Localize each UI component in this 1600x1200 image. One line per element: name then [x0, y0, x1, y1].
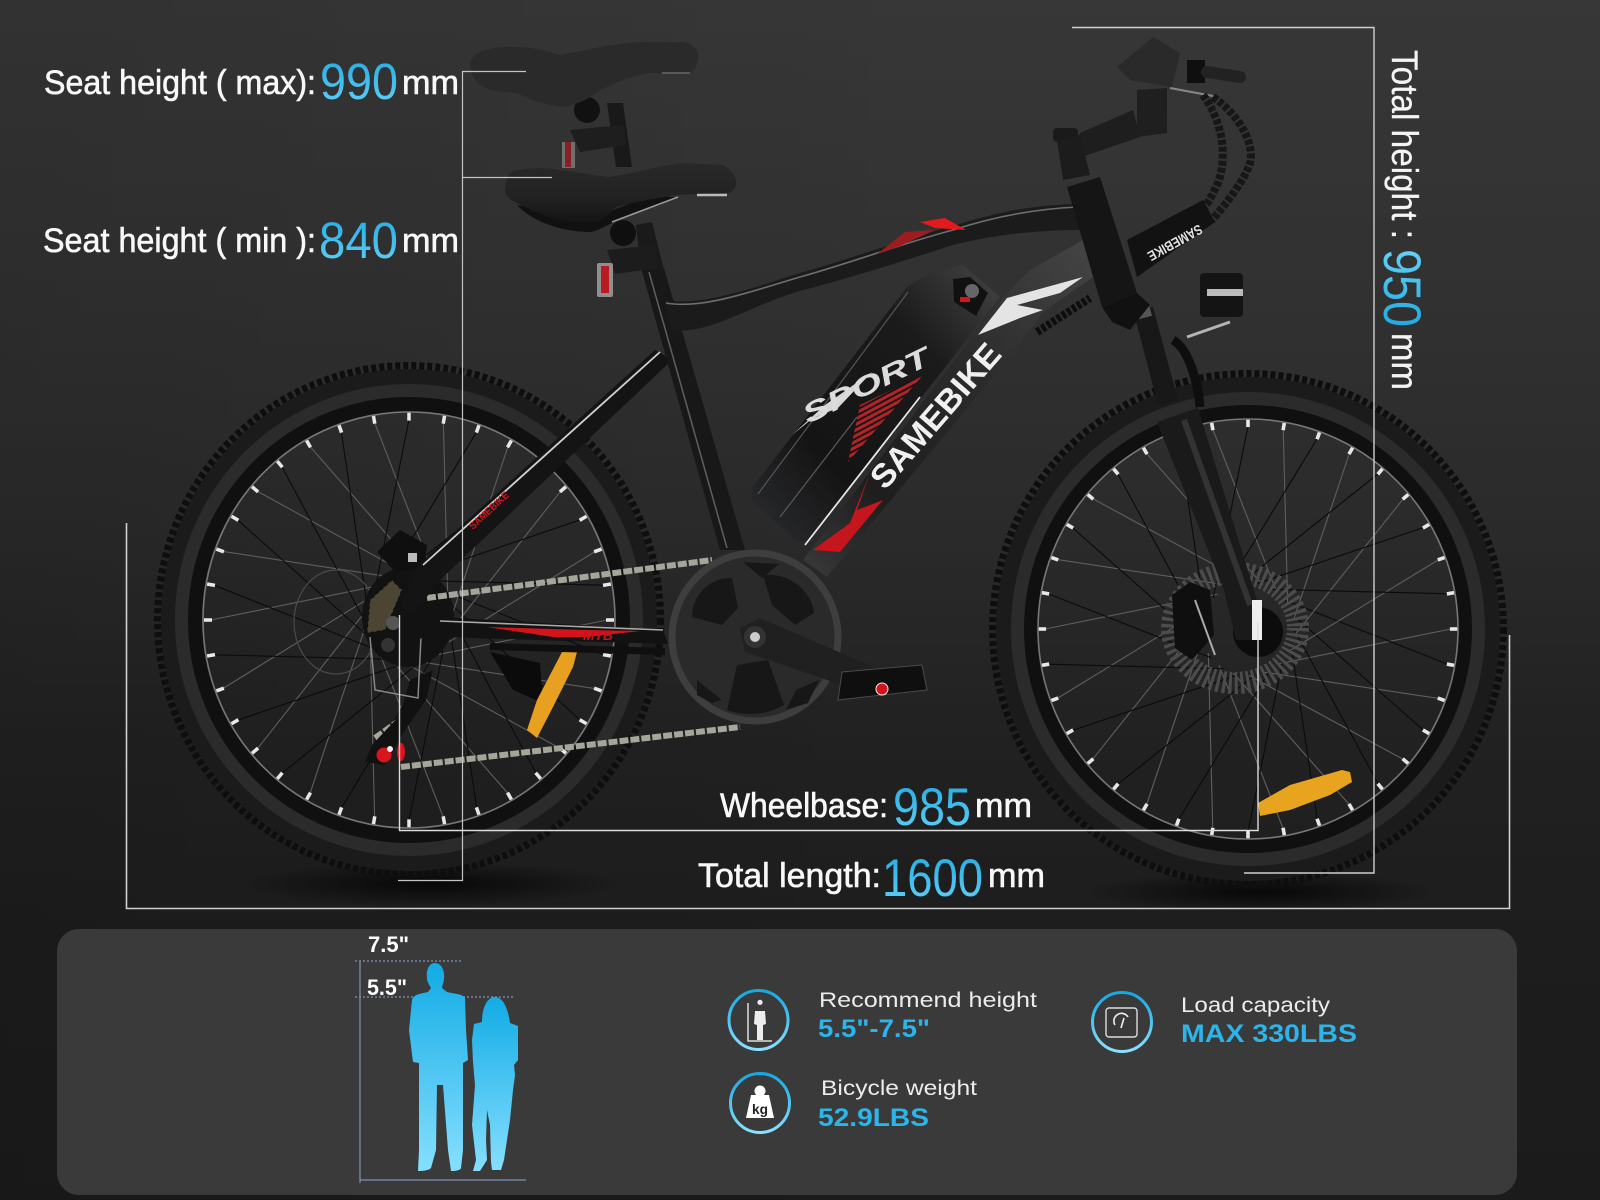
rear wheel: [158, 357, 660, 883]
head tube: [1067, 177, 1137, 307]
silhouette: man: [409, 963, 468, 1171]
label: seat height max: Seat height ( max):: [44, 64, 316, 102]
dimension line: total height: [1072, 28, 1374, 873]
down tube: [803, 240, 1093, 577]
text: bicycle weight: 52.9LBS: [818, 1104, 929, 1132]
label: wheelbase: Wheelbase:: [720, 787, 888, 825]
label: wheelbase: 985: [893, 778, 971, 837]
label: seat height max: [44, 53, 459, 110]
battery: [752, 265, 1000, 545]
front wheel: [993, 362, 1503, 896]
seat tube: [641, 268, 745, 550]
seat stay: SAMEBIKE: [468, 490, 512, 532]
label: total height: [1372, 50, 1431, 390]
silhouette: woman: [472, 997, 518, 1171]
text: load capacity: [1181, 994, 1357, 1048]
brand text on down tube: SAMEBIKE: [862, 335, 1008, 496]
label: total length: Total length:: [698, 857, 881, 895]
label: total height: Total height :: [1384, 50, 1425, 239]
label: total height: mm: [1384, 333, 1425, 390]
chain: [375, 560, 740, 767]
label: total length: [698, 849, 1045, 908]
dimension line: seat height: [398, 72, 552, 880]
cable loop: [1200, 95, 1251, 220]
height scale lines: [355, 961, 526, 1183]
label: 5.5 inches: 5.5": [367, 975, 407, 1000]
label: 7.5 inches: 7.5": [368, 932, 409, 957]
cylinder to bottom bracket: [772, 570, 805, 610]
label: total height: 950: [1372, 249, 1431, 327]
text: load capacity: MAX 330LBS: [1181, 1020, 1357, 1048]
label: wheelbase: [720, 778, 1032, 837]
white wing graphic: [978, 277, 1083, 335]
dimension line: total length: [126, 523, 1510, 908]
text: load capacity: Load capacity: [1181, 994, 1331, 1017]
label: total length: 1600: [882, 849, 983, 908]
icon: recommended height: [729, 990, 788, 1050]
top tube: [664, 204, 1082, 331]
lower saddle, min height: [505, 163, 736, 297]
label: wheelbase: mm: [975, 787, 1032, 825]
text: recommended height: [818, 989, 1037, 1043]
panel: specifications: [57, 929, 1517, 1195]
label: seat height max: mm: [402, 64, 459, 102]
headlight: [1187, 273, 1243, 337]
icon: bicycle weight: kg: [752, 1101, 768, 1117]
dimension line: wheelbase: [400, 615, 1258, 830]
battery: SPORT: [797, 340, 938, 429]
stem and handlebar: [1053, 37, 1240, 180]
label: seat height max: 990: [320, 53, 398, 110]
text: recommended height: 5.5"-7.5": [818, 1015, 930, 1043]
front brake disc and hub: [1172, 573, 1298, 683]
reflectors: [527, 652, 1352, 816]
seat stay: [400, 350, 672, 612]
label: seat height min: mm: [402, 222, 459, 260]
brand text on cable wrap: SAMEBIKE: [1145, 221, 1205, 264]
cable under down tube: [1037, 298, 1090, 332]
ground shadows: [240, 862, 1440, 912]
cable wrap: [1127, 200, 1215, 277]
chain stays: MTB: [583, 628, 613, 643]
kickstand shadow: [490, 652, 543, 703]
upper saddle, max height: [470, 42, 698, 168]
derailleur: [365, 637, 433, 765]
label: seat height min: Seat height ( min ):: [43, 222, 316, 260]
text: recommended height: Recommend height: [819, 989, 1037, 1012]
text: bicycle weight: [818, 1077, 977, 1132]
rear brake rotor: [294, 570, 378, 674]
chainring: [672, 553, 838, 721]
red flame graphic: [813, 473, 883, 552]
text: bicycle weight: Bicycle weight: [821, 1077, 977, 1100]
icon: load capacity: [1092, 992, 1152, 1052]
crank and pedal: [740, 618, 927, 700]
chain stays: [397, 605, 668, 655]
label: seat height min: 840: [319, 212, 398, 269]
label: seat height min: [43, 212, 459, 269]
icon: bicycle weight: [730, 1074, 790, 1132]
label: total length: mm: [988, 857, 1045, 895]
fork: [1102, 293, 1262, 640]
cassette, hub and brake caliper: [362, 530, 454, 667]
